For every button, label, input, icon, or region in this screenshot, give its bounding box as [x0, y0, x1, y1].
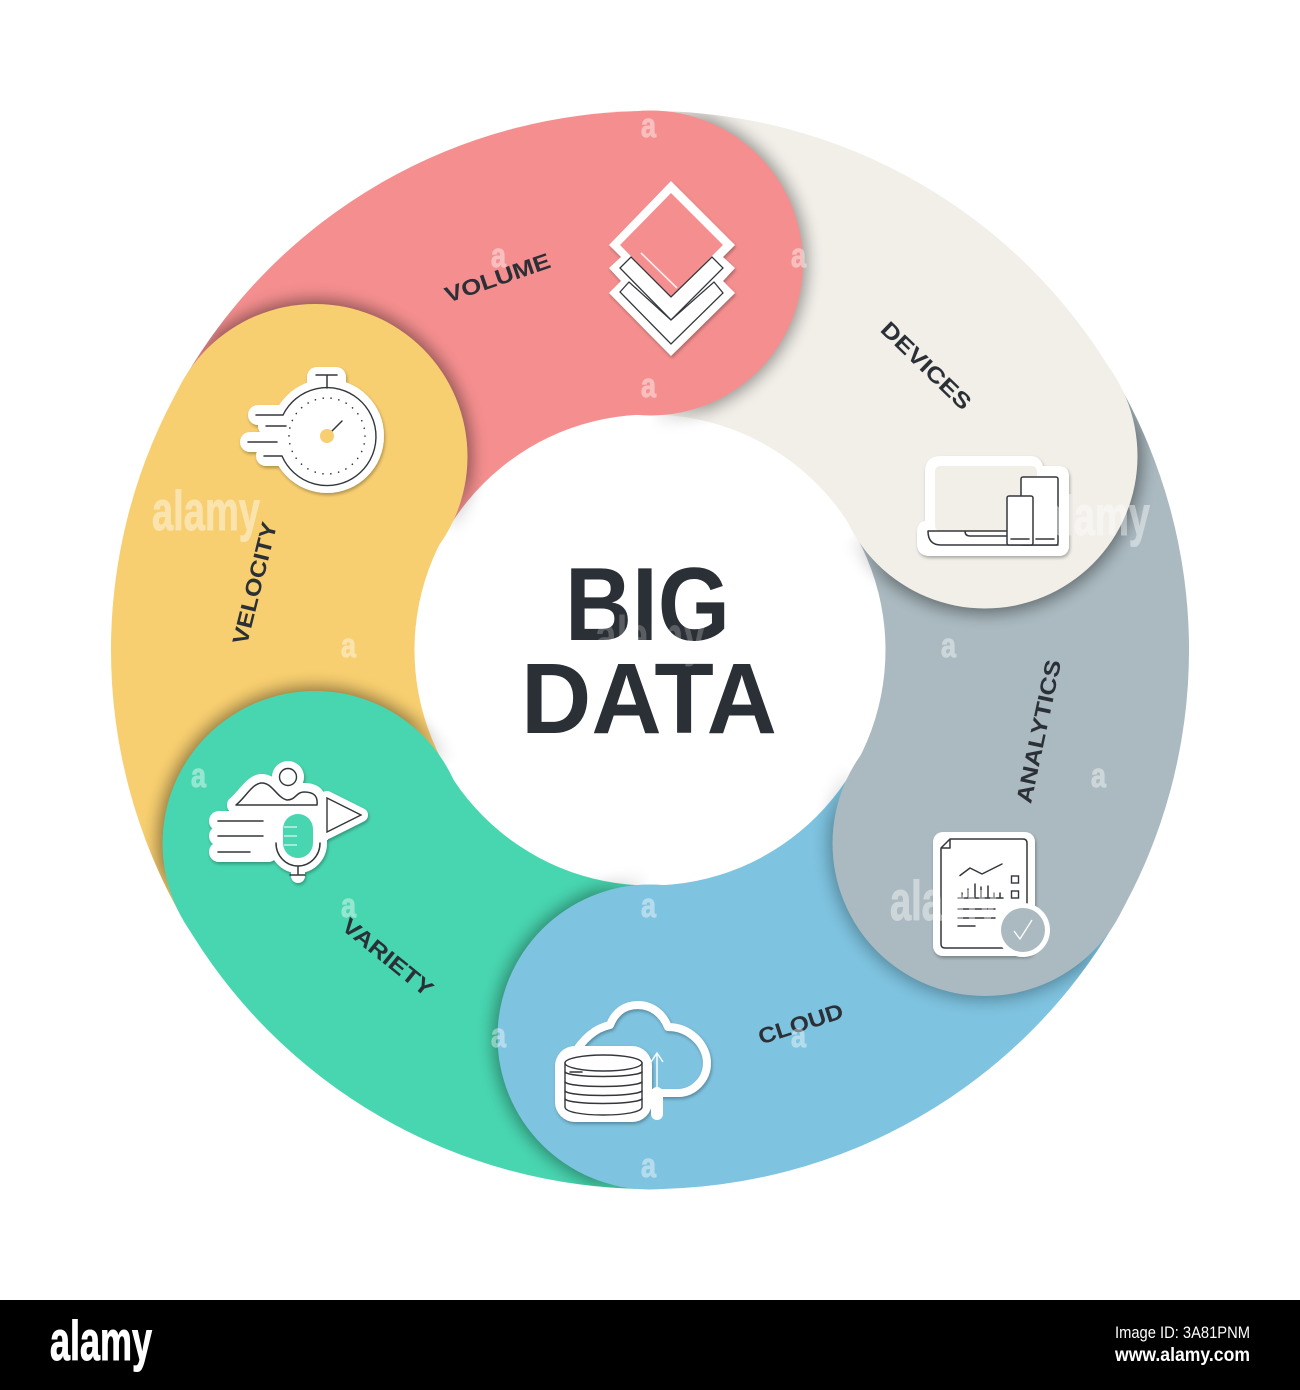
title: big data: DATA — [521, 643, 777, 755]
watermarks: a — [341, 887, 357, 925]
panel: velocity — [176, 289, 482, 642]
footer logo: alamy — [50, 1309, 152, 1372]
watermarks: a — [641, 887, 657, 925]
watermarks: a — [641, 1147, 657, 1185]
ring segments — [111, 111, 1189, 1189]
watermarks: a — [641, 367, 657, 405]
footer url: www.alamy.com — [1114, 1345, 1250, 1366]
label: volume: VOLUME — [441, 248, 554, 308]
watermarks: alamy — [152, 479, 260, 542]
watermarks: a — [941, 627, 957, 665]
label: cloud: CLOUD — [755, 998, 846, 1049]
watermarks: a — [491, 237, 507, 275]
panel: volume — [441, 106, 807, 420]
watermarks: alamy — [1042, 484, 1150, 547]
footer bar — [0, 1300, 1300, 1390]
title: big data — [521, 547, 777, 755]
label: devices: DEVICES — [876, 316, 977, 415]
centre circle — [414, 414, 886, 886]
icon: mixed media — [218, 761, 361, 876]
icon: laptop and phones — [917, 456, 1069, 556]
watermarks: alamy — [595, 604, 705, 667]
watermarks: a — [341, 627, 357, 665]
label: velocity: VELOCITY — [227, 519, 282, 647]
watermarks — [152, 107, 1150, 1185]
footer image id: Image ID: 3A81PNM — [1115, 1323, 1250, 1342]
icon: cloud database — [555, 1005, 707, 1122]
panel: analytics — [820, 660, 1124, 1009]
watermarks: a — [791, 1017, 807, 1055]
watermarks: a — [791, 237, 807, 275]
icon: report with check badge — [933, 832, 1050, 957]
watermarks: a — [641, 107, 657, 145]
label: variety: VARIETY — [337, 913, 439, 1002]
title: big data: BIG — [565, 547, 730, 663]
watermarks: alamy — [890, 869, 998, 932]
panel: variety — [148, 676, 454, 994]
panel: cloud — [493, 880, 846, 1194]
icon: stacked layers — [609, 181, 735, 356]
watermarks: a — [1091, 757, 1107, 795]
icon: stopwatch — [248, 367, 384, 493]
label: analytics: ANALYTICS — [1011, 657, 1066, 805]
watermarks: a — [491, 1017, 507, 1055]
panel: devices — [848, 321, 1152, 623]
watermarks: a — [191, 757, 207, 795]
